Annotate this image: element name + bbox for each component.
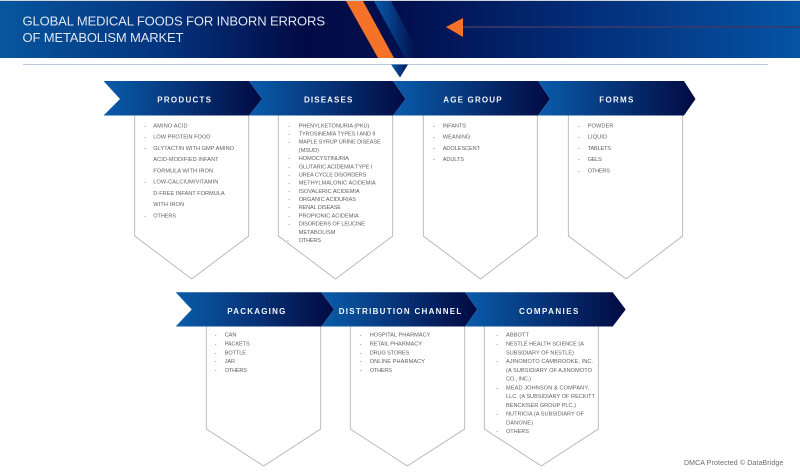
list <box>144 123 235 219</box>
header banner <box>0 0 800 58</box>
list <box>433 123 481 163</box>
panel box <box>350 326 465 466</box>
list: NESTLÉ HEALTH SCIENCE (A <box>506 340 584 348</box>
list: (MSUD) <box>299 148 319 154</box>
list: - <box>496 429 498 435</box>
list: METHYLMALONIC ACIDEMIA <box>299 181 376 187</box>
chevron header <box>104 81 262 116</box>
list: - <box>288 164 290 170</box>
list: - <box>360 368 362 374</box>
small down triangle <box>391 64 408 78</box>
panel box <box>423 115 537 279</box>
list: ABBOTT <box>506 333 530 339</box>
list: GLYTACTIN WITH GMP AMINO <box>153 146 235 152</box>
chevron header <box>249 81 406 116</box>
list: - <box>144 123 146 129</box>
list: WITH IRON <box>153 202 184 208</box>
list: OTHERS <box>506 429 529 435</box>
list: HOSPITAL PHARMACY <box>370 333 431 339</box>
panel box <box>206 326 321 466</box>
list: CO., INC.) <box>506 376 531 382</box>
panel box <box>278 115 393 279</box>
list: BOTTLE <box>225 350 246 356</box>
chevron header <box>538 81 696 116</box>
list: SUBSIDIARY OF NESTLÉ) <box>506 349 574 356</box>
list: - <box>578 157 580 163</box>
list: PACKETS <box>225 342 250 348</box>
list: - <box>578 135 580 141</box>
list: HOMOCYSTINURIA <box>299 156 349 162</box>
list: JAR <box>225 359 235 365</box>
list: - <box>288 140 290 146</box>
panel box <box>484 326 598 466</box>
list: - <box>215 359 217 365</box>
list: TABLETS <box>588 146 611 152</box>
list: - <box>288 197 290 203</box>
list: - <box>288 213 290 219</box>
heading: AGE GROUP <box>443 96 502 105</box>
list: FORMULA WITH IRON <box>153 168 213 174</box>
heading: PRODUCTS <box>157 96 212 105</box>
list: ISOVALERIC ACIDEMIA <box>299 189 360 195</box>
list <box>215 333 250 374</box>
list: DANONE) <box>506 420 533 426</box>
list: LOW PROTEIN FOOD <box>153 135 210 141</box>
list: - <box>578 146 580 152</box>
list: UREA CYCLE DISORDERS <box>299 172 367 178</box>
list: BENCKISER GROUP PLC.) <box>506 403 576 409</box>
list: - <box>578 168 580 174</box>
list: GLUTARIC ACIDEMIA TYPE I <box>299 164 373 170</box>
list: METABOLISM <box>299 230 336 236</box>
panel: forms <box>538 81 696 279</box>
list <box>496 333 596 435</box>
list: LLC. (A SUBSIDIARY OF RECKITT <box>506 394 596 400</box>
decorative blue stripe <box>374 1 421 58</box>
footer credit: DMCA Protected © DataBridge <box>684 459 783 467</box>
list: - <box>288 172 290 178</box>
list: - <box>433 135 435 141</box>
list: - <box>496 342 498 348</box>
chevron header <box>465 292 626 326</box>
list <box>287 123 381 244</box>
list: OTHERS <box>588 168 610 174</box>
list: POWDER <box>588 123 613 129</box>
list: NUTRICIA (A SUBSIDIARY OF <box>506 412 585 418</box>
list: OTHERS <box>370 368 392 374</box>
list: - <box>496 359 498 365</box>
heading: DISEASES <box>304 96 353 105</box>
list: - <box>433 157 435 163</box>
list: - <box>215 368 217 374</box>
list: OTHERS <box>299 238 321 244</box>
list: D-FREE INFANT FORMULA <box>153 191 225 197</box>
list: - <box>360 359 362 365</box>
list: RETAIL PHARMACY <box>370 342 422 348</box>
panel: companies <box>465 292 626 466</box>
decorative orange stripe <box>346 1 394 58</box>
panel: packaging <box>176 292 334 466</box>
list: - <box>215 342 217 348</box>
list: LOW-CALCIUM/VITAMIN <box>153 180 218 186</box>
list: DRUG STORES <box>370 350 410 356</box>
list: - <box>144 180 146 186</box>
list: DISORDERS OF LEUCINE <box>299 222 365 228</box>
heading: PACKAGING <box>227 307 285 316</box>
panel: diseases <box>249 81 406 279</box>
list: GELS <box>588 157 602 163</box>
panel box <box>568 115 683 279</box>
list: CAN <box>225 333 236 339</box>
list: ACID-MODIFIED INFANT <box>153 157 219 163</box>
panel: distribution channel <box>321 292 477 466</box>
list: - <box>288 205 290 211</box>
chevron header <box>321 292 477 326</box>
list: TYROSINEMIA TYPES I AND II <box>299 132 376 138</box>
list <box>578 123 613 174</box>
heading: DISTRIBUTION CHANNEL <box>339 307 461 316</box>
list: ADULTS <box>443 157 464 163</box>
list: ORGANIC ACIDURIAS <box>299 197 356 203</box>
list: OTHERS <box>153 213 176 219</box>
chevron header <box>393 81 550 116</box>
list: OTHERS <box>225 368 247 374</box>
list: - <box>144 213 146 219</box>
list: - <box>360 333 362 339</box>
heading: COMPANIES <box>519 307 579 316</box>
list: - <box>433 123 435 129</box>
list: - <box>433 146 435 152</box>
list: PHENYLKETONURIA (PKU) <box>299 123 370 129</box>
title: GLOBAL MEDICAL FOODS FOR INBORN ERRORS <box>22 13 325 28</box>
list: - <box>288 222 290 228</box>
orange arrow pointer <box>446 18 800 37</box>
list: - <box>496 385 498 391</box>
list: - <box>144 135 146 141</box>
list: - <box>288 132 290 138</box>
list: PROPIONIC ACIDEMIA <box>299 213 359 219</box>
divider line <box>23 64 768 65</box>
list: - <box>496 412 498 418</box>
list: WEANING <box>443 135 470 141</box>
list: (A SUBSIDIARY OF AJINOMOTO <box>506 368 593 374</box>
list: - <box>288 123 290 129</box>
list: ONLINE PHARMACY <box>370 359 425 365</box>
list: - <box>288 181 290 187</box>
list: AJINOMOTO CAMBROOKE, INC. <box>506 359 593 365</box>
list: RENAL DISEASE <box>299 205 341 211</box>
list: - <box>578 123 580 129</box>
list: - <box>287 238 289 244</box>
list: - <box>288 189 290 195</box>
title: OF METABOLISM MARKET <box>22 30 184 45</box>
panel: age group <box>393 81 550 279</box>
list: AMINO ACID <box>153 123 188 129</box>
panel: products <box>104 81 262 279</box>
list: INFANTS <box>443 123 466 129</box>
list: MAPLE SYRUP URINE DISEASE <box>299 140 381 146</box>
panel box <box>135 115 249 279</box>
heading: FORMS <box>599 96 634 105</box>
list <box>360 333 431 374</box>
chevron header <box>176 292 334 326</box>
list: - <box>496 333 498 339</box>
list: - <box>215 350 217 356</box>
list: - <box>360 350 362 356</box>
list: - <box>215 333 217 339</box>
title <box>22 13 325 45</box>
list: MEAD JOHNSON & COMPANY, <box>506 385 589 391</box>
list: LIQUID <box>588 135 607 141</box>
list: - <box>360 342 362 348</box>
list: - <box>288 156 290 162</box>
list: ADOLESCENT <box>443 146 481 152</box>
list: - <box>144 146 146 152</box>
